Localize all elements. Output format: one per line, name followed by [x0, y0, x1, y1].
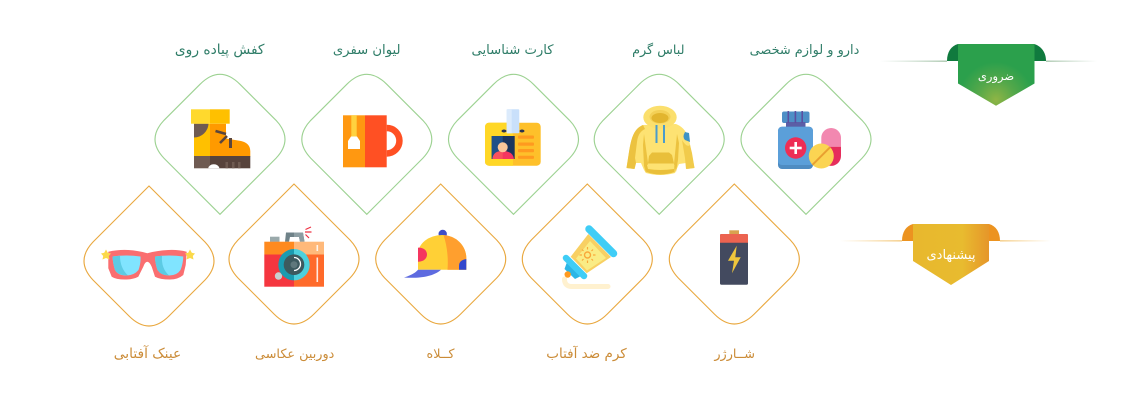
item: ID card: کارت شناسایی: [471, 43, 554, 58]
item: sunglasses: عینک آفتابی: [114, 345, 181, 362]
item: charger: [669, 184, 799, 362]
item: camera: [229, 184, 359, 362]
item: hiking boots: کفش پیاده روی: [175, 42, 265, 58]
item: ID card: [448, 43, 578, 214]
item: travel mug: لیوان سفری: [333, 43, 401, 58]
panel: essential items: [155, 42, 1097, 214]
icon: sunscreen tube: [564, 229, 614, 286]
item: sunscreen: [522, 184, 652, 362]
icon: baseball cap: [404, 230, 466, 278]
badge: suggested: [840, 224, 1051, 285]
icon: battery: [720, 230, 748, 285]
item: travel mug: [302, 43, 432, 214]
item: hat: کــلاه: [427, 347, 455, 362]
item: warm clothes: لباس گرم: [632, 42, 685, 58]
item: hiking boots: [155, 42, 285, 214]
icon: yellow hoodie: [626, 106, 694, 175]
icon: medicine bottle and pills: [778, 111, 841, 169]
item: charger: شــارژر: [713, 347, 755, 362]
icon: hiking boot: [191, 109, 250, 168]
icon: mug with tea bag: [343, 115, 403, 167]
item: camera: دوربین عکاسی: [255, 347, 334, 362]
icon: camera: [264, 227, 324, 287]
badge: suggested: پیشنهادی: [927, 248, 976, 263]
item: sunglasses: [84, 186, 214, 362]
panel: suggested items: [84, 184, 1051, 362]
item: medicine and toiletries: [741, 43, 871, 214]
badge: essential: [880, 44, 1097, 106]
icon: ID badge: [485, 109, 541, 166]
item: warm clothes: [594, 42, 724, 214]
item: sunscreen: کرم ضد آفتاب: [546, 345, 627, 362]
item: hat: [376, 184, 506, 362]
item: medicine and toiletries: دارو و لوازم شخصی: [750, 43, 859, 58]
icon: sunglasses: [101, 250, 195, 280]
badge: essential: ضروری: [978, 69, 1014, 84]
